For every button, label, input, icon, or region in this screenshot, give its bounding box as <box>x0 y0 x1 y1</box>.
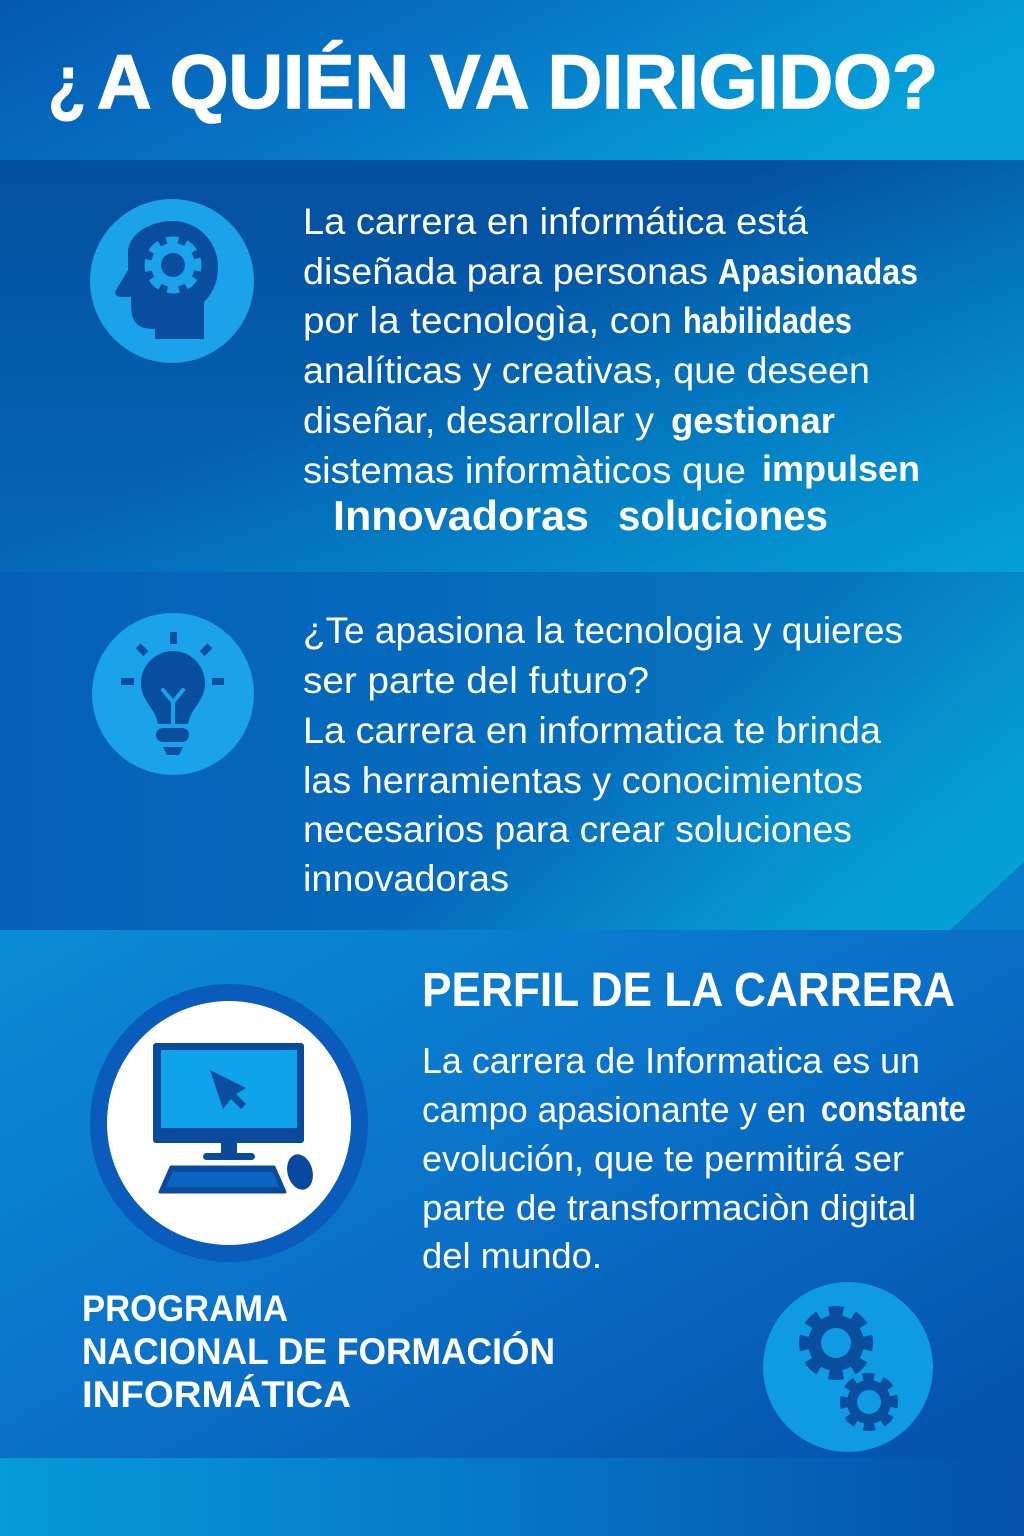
text block: program name <box>82 1288 555 1415</box>
text block: audience description: impulsen <box>762 448 920 489</box>
text block: audience description: soluciones <box>618 492 828 539</box>
text block: audience description: sistemas informàticos que <box>303 450 746 491</box>
title: ¿ <box>48 40 86 125</box>
text block: call to action: innovadoras <box>303 858 509 899</box>
text block: audience description: Apasionadas <box>718 251 918 292</box>
text block: program name: NACIONAL DE FORMACIÓN <box>82 1330 555 1372</box>
text block: audience description: gestionar <box>671 400 835 441</box>
panel: call to action <box>0 572 1024 930</box>
text block: audience description: diseñada para personas <box>303 251 708 292</box>
text block: audience description <box>303 201 920 539</box>
text block: career profile: constante <box>821 1088 966 1129</box>
text block: call to action: necesarios para crear soluciones <box>303 809 852 850</box>
text block: audience description: La carrera en informática está <box>303 201 808 242</box>
text block: career profile: parte de transformaciòn digital <box>422 1187 916 1228</box>
text block: call to action <box>303 610 903 899</box>
text block: call to action: las herramientas y conocimientos <box>303 760 863 801</box>
title: A QUIÉN VA DIRIGIDO? <box>97 40 938 125</box>
text block: audience description: habilidades <box>683 300 852 341</box>
text block: call to action: ser parte del futuro? <box>303 660 649 701</box>
text block: call to action: ¿Te apasiona la tecnologia y quieres <box>303 610 903 651</box>
panel: header <box>0 0 1024 160</box>
text block: audience description: analíticas y creativas, que deseen <box>303 350 870 391</box>
panel: career profile <box>0 930 1024 1458</box>
text block: career profile: del mundo. <box>422 1235 602 1276</box>
text block: program name: PROGRAMA <box>82 1288 288 1329</box>
text block: career profile: evolución, que te permitirá ser <box>422 1138 904 1179</box>
text block: career profile <box>422 1040 966 1276</box>
footer band <box>0 1458 1024 1536</box>
text block: career profile: La carrera de Informatica es un <box>422 1040 920 1081</box>
text block: program name: INFORMÁTICA <box>82 1374 351 1415</box>
panel: audience description <box>0 160 1024 572</box>
text block: career profile: campo apasionante y en <box>422 1089 806 1130</box>
icon: head with gear <box>90 199 254 363</box>
text block: audience description: por la tecnologìa, con <box>303 300 672 341</box>
text block: call to action: La carrera en informatica te brinda <box>303 710 881 751</box>
icon: computer <box>90 984 368 1262</box>
text block: audience description: Innovadoras <box>333 492 589 539</box>
text block: audience description: diseñar, desarrollar y <box>303 400 654 441</box>
icon: light bulb <box>92 613 254 775</box>
heading: career profile: PERFIL DE LA CARRERA <box>422 964 955 1017</box>
icon: gears <box>763 1282 933 1452</box>
